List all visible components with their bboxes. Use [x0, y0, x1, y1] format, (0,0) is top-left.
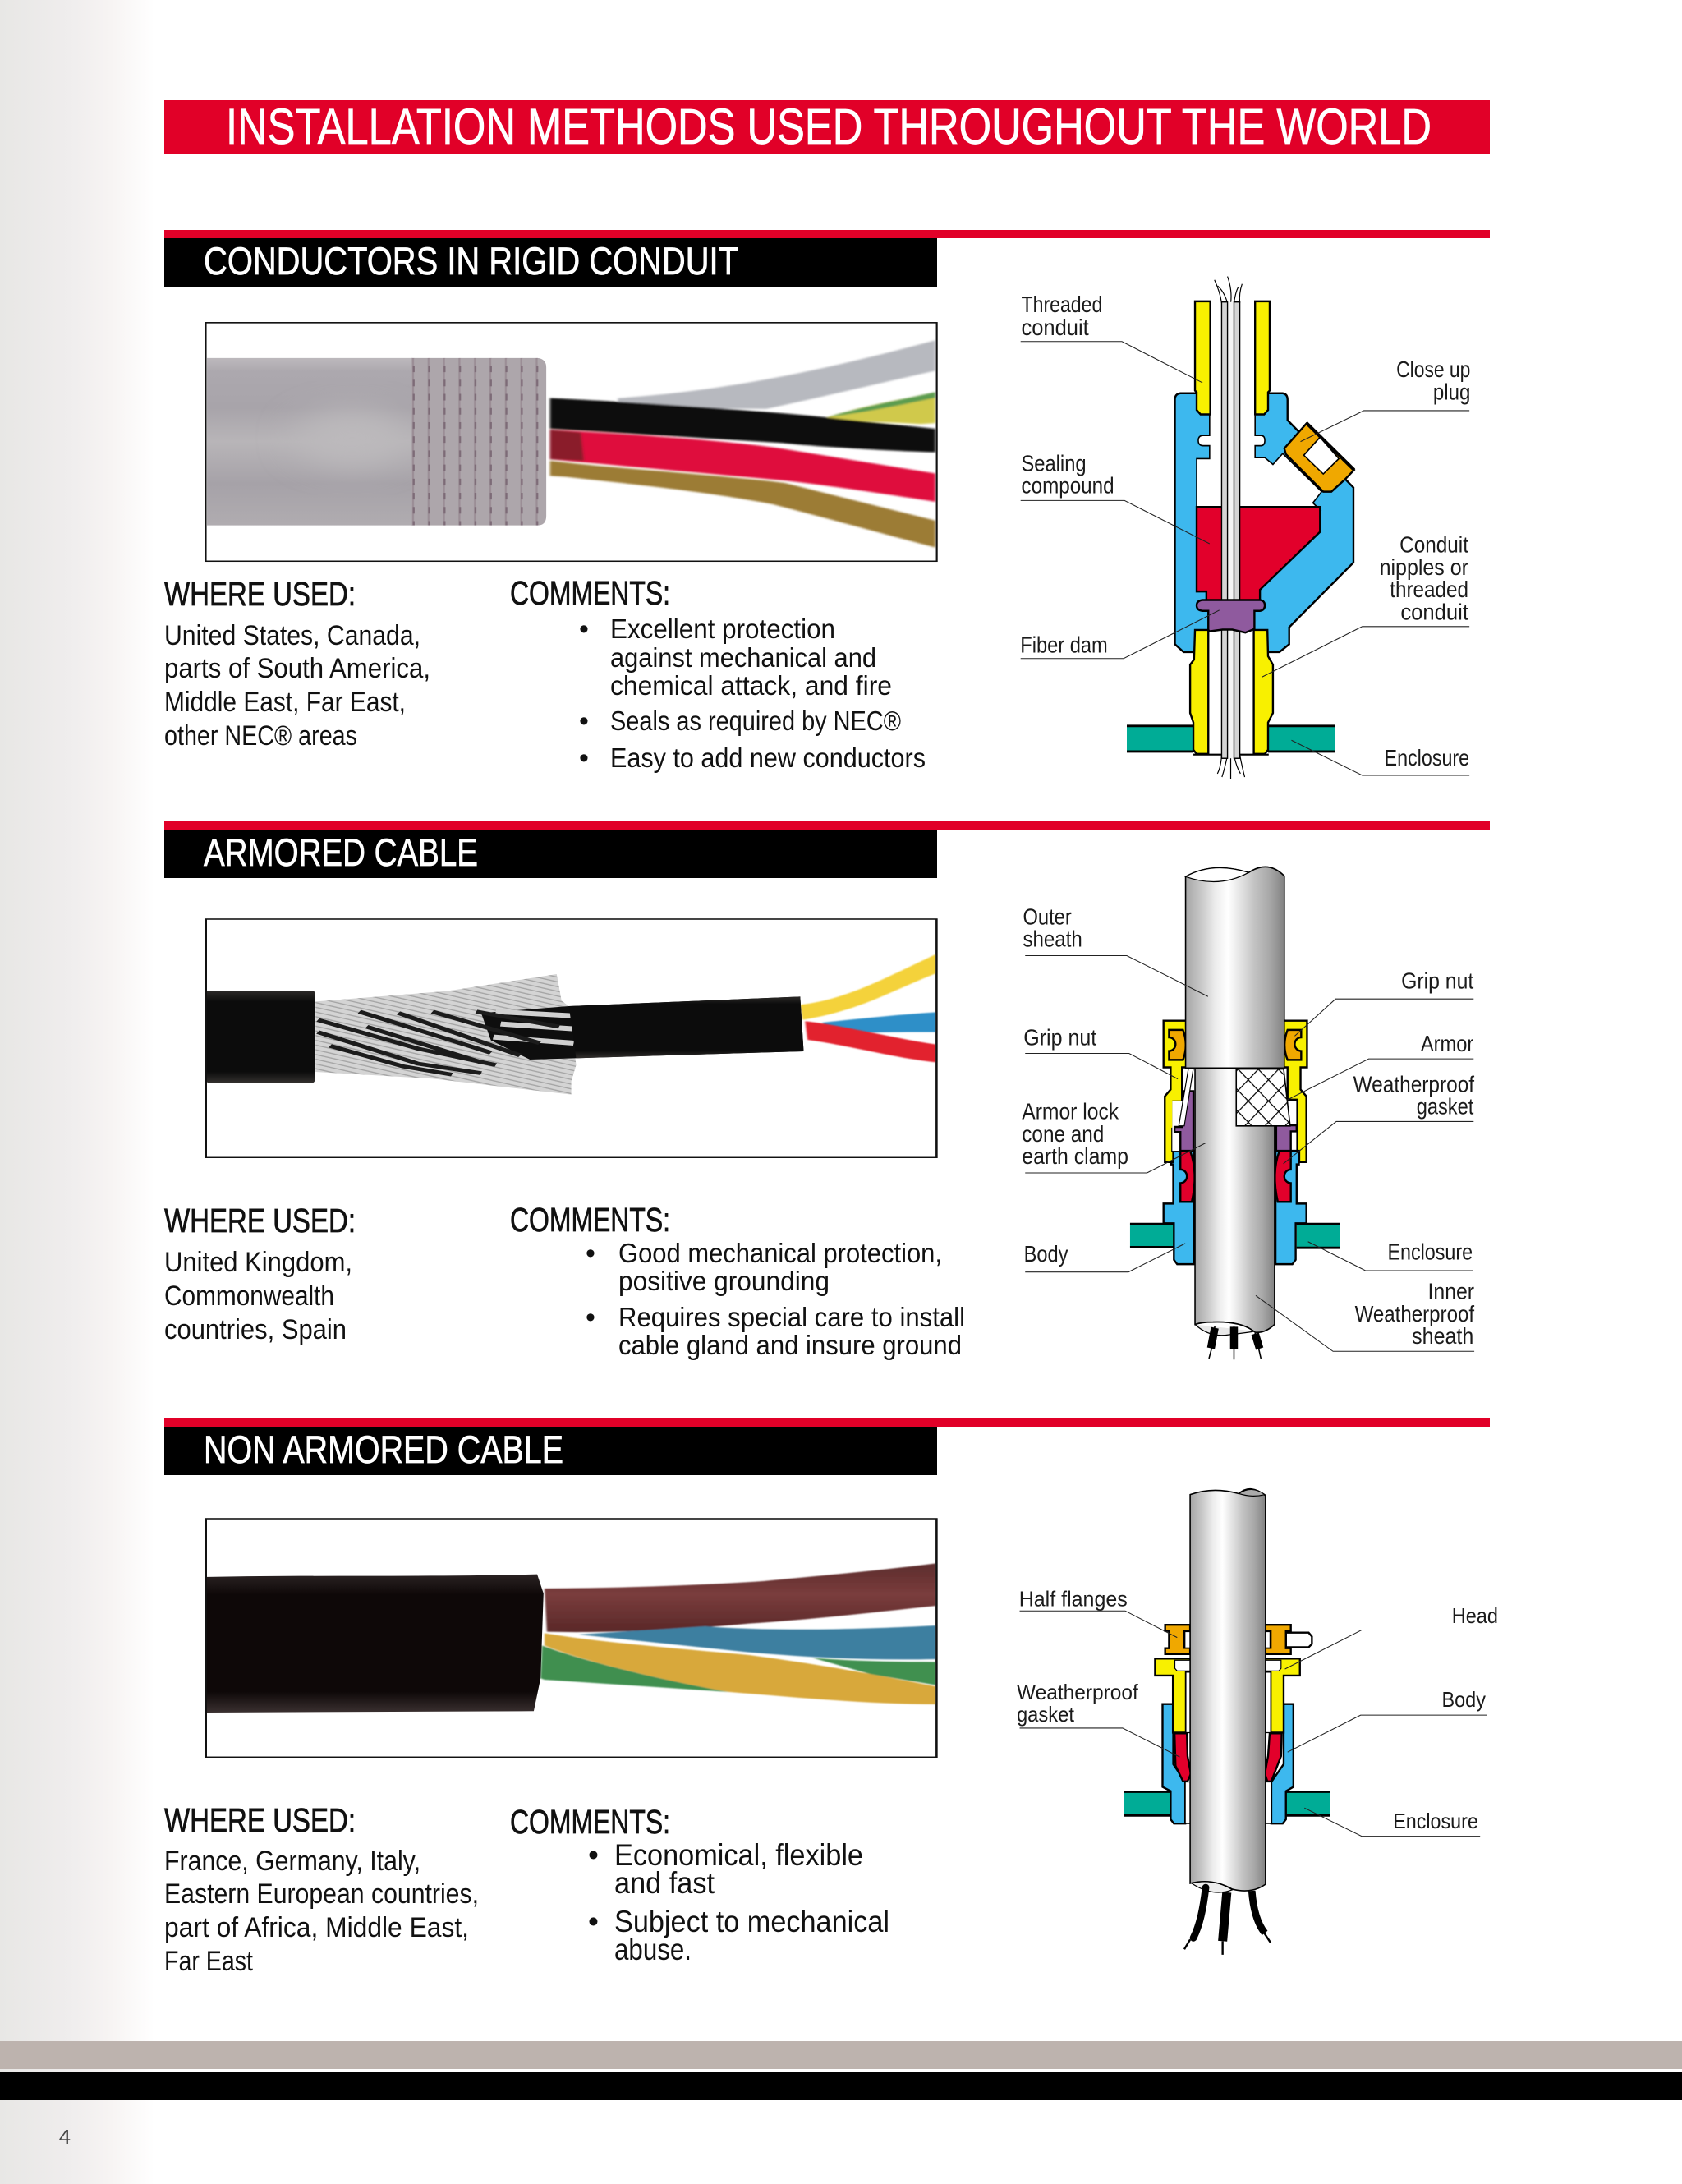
text: where used: United States, Canada, [164, 620, 420, 651]
diagram labels: Enclosure [1388, 1239, 1473, 1265]
diagram labels: Inner [1428, 1279, 1474, 1304]
text: comments [510, 1803, 889, 1966]
heading: non armored cable: NON ARMORED CABLE [204, 1428, 563, 1471]
diagram labels: earth clamp [1022, 1144, 1128, 1169]
diagram labels: Conduit [1399, 532, 1468, 558]
text: comments: and fast [614, 1866, 715, 1900]
diagram labels: threaded [1390, 577, 1468, 602]
heading: conductors in rigid conduit [164, 230, 1490, 287]
title banner: INSTALLATION METHODS USED THROUGHOUT THE WORLD [226, 99, 1432, 154]
heading: armored cable [164, 821, 1490, 878]
text: where used [164, 575, 430, 752]
diagram labels: gasket [1017, 1702, 1075, 1727]
diagram labels: conduit [1400, 600, 1468, 625]
text: where used: parts of South America, [164, 653, 430, 684]
diagram labels: gasket [1417, 1094, 1474, 1120]
page background with left shading [0, 0, 154, 2184]
text: comments: abuse. [614, 1933, 692, 1966]
text: comments: COMMENTS: [510, 1201, 670, 1239]
diagram labels: Threaded [1021, 292, 1102, 317]
text: comments: Economical, flexible [614, 1838, 863, 1872]
text: comments: positive grounding [618, 1266, 830, 1296]
diagram labels: Armor [1421, 1031, 1473, 1056]
text: where used [164, 1801, 479, 1977]
text: comments: • [579, 743, 589, 774]
diagram labels: Weatherproof [1017, 1680, 1139, 1704]
diagram labels: Head [1452, 1603, 1498, 1628]
text: comments: COMMENTS: [510, 574, 670, 612]
diagram labels [1017, 1586, 1498, 1837]
text: where used [164, 1202, 356, 1345]
diagram labels: sheath [1023, 926, 1082, 952]
text: where used: WHERE USED: [164, 575, 356, 613]
diagram: non armored cable gland [1017, 1489, 1498, 1955]
text: where used: Eastern European countries, [164, 1878, 479, 1910]
diagram labels: conduit [1021, 315, 1089, 340]
text: where used: WHERE USED: [164, 1202, 356, 1239]
page number: 4 [58, 2126, 71, 2150]
text: comments: cable gland and insure ground [618, 1330, 962, 1360]
text: where used: Commonwealth [164, 1281, 334, 1312]
text: comments: • [588, 1838, 599, 1872]
text: comments [510, 1201, 965, 1360]
diagram labels: plug [1433, 379, 1470, 405]
section: non armored cable [164, 1418, 1498, 1977]
diagram labels: Enclosure [1385, 745, 1469, 770]
diagram: armored cable gland [1022, 867, 1475, 1359]
diagram labels: compound [1021, 473, 1114, 499]
diagram: conduit seal fitting [1020, 277, 1470, 779]
text: comments: Subject to mechanical [614, 1905, 889, 1938]
text: comments: COMMENTS: [510, 1803, 670, 1841]
text: comments: Easy to add new conductors [610, 743, 926, 773]
photo: non armored cable with coloured conductors [206, 1519, 936, 1757]
diagram labels: Close up [1396, 356, 1470, 382]
heading: armored cable: ARMORED CABLE [204, 830, 478, 874]
text: where used: Middle East, Far East, [164, 687, 406, 718]
text: where used: Far East [164, 1946, 253, 1977]
text: where used: countries, Spain [164, 1314, 347, 1345]
diagram labels: sheath [1412, 1324, 1473, 1349]
text: comments: • [586, 1238, 595, 1269]
text: comments [510, 574, 926, 774]
text: where used: part of Africa, Middle East, [164, 1912, 469, 1943]
diagram labels: nipples or [1380, 554, 1468, 580]
footer bands [0, 2041, 1682, 2100]
diagram labels: Grip nut [1023, 1025, 1097, 1051]
diagram labels: Half flanges [1019, 1586, 1128, 1611]
text: comments: against mechanical and [610, 642, 876, 673]
text: comments: Good mechanical protection, [618, 1238, 942, 1268]
section: conductors in rigid conduit [164, 230, 1490, 779]
text: comments: chemical attack, and fire [610, 670, 892, 701]
diagram labels: Sealing [1021, 451, 1087, 476]
diagram labels: cone and [1022, 1121, 1104, 1147]
diagram labels: Weatherproof [1355, 1301, 1475, 1326]
text: where used: WHERE USED: [164, 1801, 356, 1839]
text: comments: Requires special care to install [618, 1302, 965, 1332]
section: armored cable [164, 821, 1490, 1360]
diagram labels: Outer [1023, 904, 1072, 929]
diagram labels: Armor lock [1022, 1099, 1119, 1124]
text: where used: other NEC® areas [164, 720, 357, 752]
heading: non armored cable [164, 1418, 1490, 1475]
diagram labels: Grip nut [1401, 968, 1474, 993]
diagram labels: Weatherproof [1353, 1072, 1475, 1097]
text: comments: • [588, 1905, 599, 1938]
text: where used: France, Germany, Italy, [164, 1846, 420, 1877]
heading: conductors in rigid conduit: CONDUCTORS IN RIGID CONDUIT [204, 239, 738, 283]
diagram labels: Body [1442, 1687, 1486, 1712]
diagram labels: Enclosure [1393, 1809, 1478, 1833]
text: comments: • [579, 614, 589, 645]
text: where used: United Kingdom, [164, 1247, 352, 1278]
text: comments: • [579, 706, 589, 737]
photo: armored cable with steel wires [206, 919, 936, 1157]
photo: conductors leaving threaded conduit [206, 323, 937, 561]
diagram labels: Fiber dam [1020, 632, 1108, 657]
diagram labels: Body [1024, 1241, 1068, 1267]
diagram labels [1020, 292, 1470, 775]
text: comments: • [586, 1302, 595, 1333]
text: comments: Seals as required by NEC® [610, 706, 901, 736]
text: comments: Excellent protection [610, 614, 835, 644]
diagram labels [1022, 904, 1475, 1351]
